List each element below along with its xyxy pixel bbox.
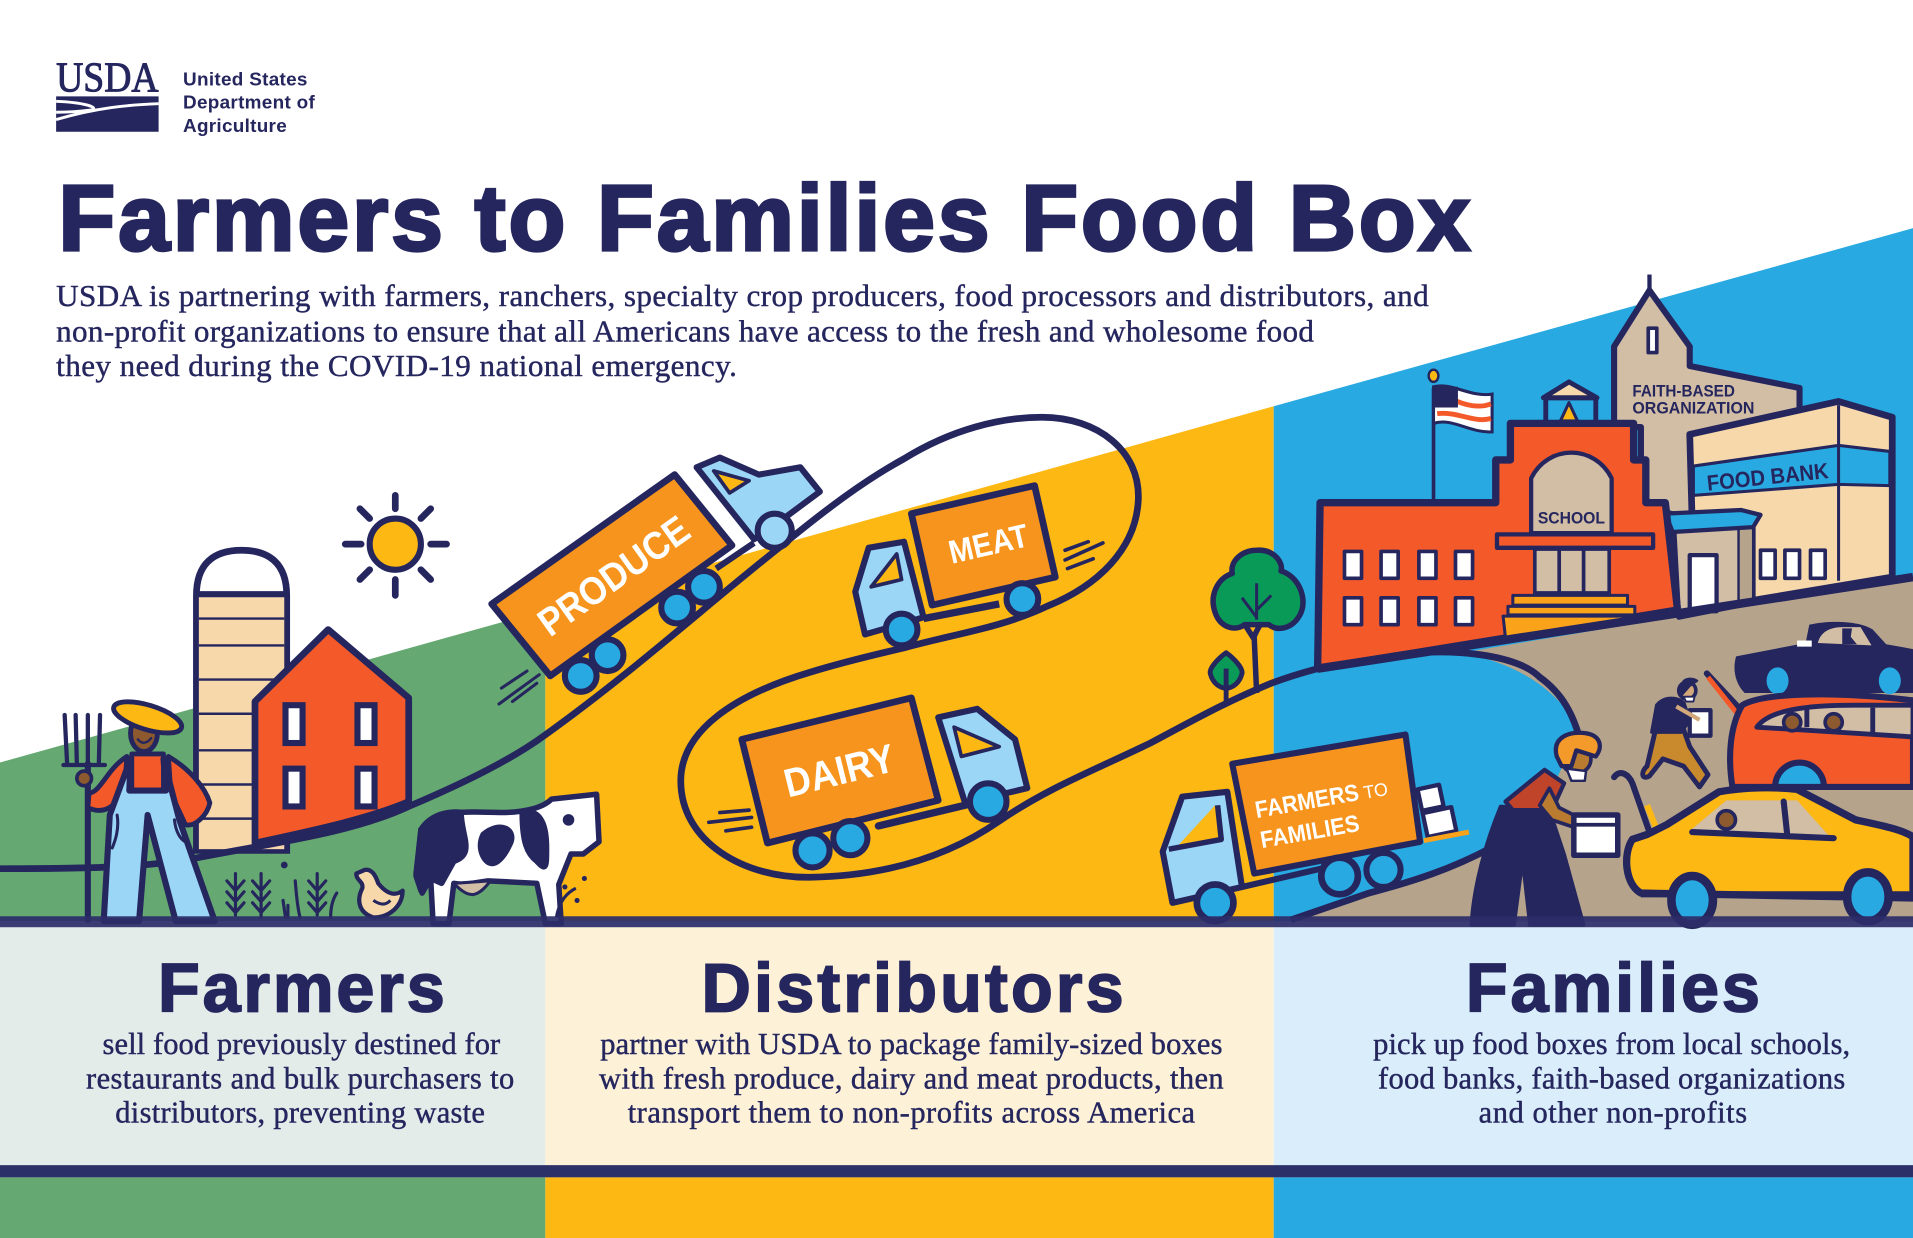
logo text: United States Department of Agriculture	[183, 69, 315, 137]
icon: flag and pole	[1429, 370, 1492, 503]
label: school: SCHOOL	[1538, 509, 1605, 527]
truck label: farmers to families: TO	[1362, 778, 1389, 803]
truck label: farmers to families: FARMERS	[1253, 779, 1361, 824]
text: distributors description: with fresh produce, dairy and meat products, then	[599, 1061, 1224, 1095]
illustration: large tree	[1213, 550, 1303, 693]
label: faith-based organization	[1632, 383, 1754, 418]
text: distributors description: transport them to non-profits across America	[628, 1095, 1195, 1129]
road: winding route from farm to families	[0, 417, 1581, 877]
label: faith-based organization: FAITH-BASED	[1632, 383, 1735, 401]
logo text: United States Department of Agriculture: Department of	[183, 93, 315, 114]
footer band: green	[0, 1177, 545, 1238]
icon: sun	[345, 495, 447, 595]
label: faith-based organization: ORGANIZATION	[1632, 400, 1754, 418]
road: upper ground line under buildings	[1318, 577, 1913, 669]
speed lines: meat truck	[1065, 542, 1103, 569]
illustration: wheat and grass	[227, 863, 337, 917]
background: farmers green wedge	[0, 610, 545, 921]
truck: farmers to families	[1163, 734, 1469, 921]
text: families description: pick up food boxes from local schools,	[1373, 1027, 1850, 1061]
background: families blue wedge	[1274, 228, 1913, 921]
illustration: silo	[196, 550, 287, 850]
heading: farmers: Farmers	[158, 950, 445, 1026]
illustration: chick	[356, 870, 403, 917]
vehicle: red car	[1707, 673, 1913, 787]
text: families description: and other non-profits	[1479, 1095, 1747, 1129]
truck: produce	[492, 458, 820, 692]
logo text: United States Department of Agriculture: Agriculture	[183, 116, 287, 137]
building: food bank	[1690, 401, 1892, 610]
label: food bank: FOOD BANK	[1706, 458, 1830, 496]
truck label: farmers to families	[1253, 774, 1395, 854]
speed lines: dairy truck	[709, 810, 752, 831]
truck label: farmers to families: FAMILIES	[1258, 810, 1361, 854]
illustration: walking volunteer with box	[1643, 679, 1710, 787]
illustration: cow	[416, 794, 599, 924]
logo: USDA: USDA	[56, 55, 159, 102]
footer band: blue	[1274, 1177, 1913, 1238]
text: farmers description: restaurants and bulk purchasers to	[86, 1061, 514, 1095]
text: families description: food banks, faith-based organizations	[1378, 1061, 1845, 1095]
building: school bell tower	[1543, 382, 1597, 423]
background: families tan ground	[1291, 577, 1913, 921]
footer stripe	[0, 1165, 1913, 1177]
illustration: small tree	[1210, 653, 1242, 704]
background: distributors yellow wedge	[545, 406, 1274, 921]
road: lower road to pickup site	[1291, 848, 1491, 920]
heading: distributors: Distributors	[702, 950, 1124, 1026]
illustration: farmer with pitchfork	[63, 695, 215, 921]
illustration: grass sprig	[556, 876, 586, 917]
footer band: yellow	[545, 1177, 1274, 1238]
intro paragraph: non-profit organizations to ensure that all Americans have access to the fresh and wholesome food	[56, 314, 1314, 349]
text: distributors description	[599, 1027, 1224, 1129]
panel: farmers caption background	[0, 927, 545, 1166]
text: farmers description: sell food previously destined for	[102, 1027, 500, 1061]
panel: distributors caption background	[545, 927, 1274, 1166]
intro paragraph: USDA is partnering with farmers, ranchers, specialty crop producers, food processors and distributors, and	[56, 278, 1429, 313]
ground band	[0, 916, 1913, 927]
illustration: barn	[255, 630, 409, 843]
speed lines: produce truck	[499, 671, 539, 704]
intro paragraph: they need during the COVID-19 national emergency.	[56, 348, 737, 383]
illustration: volunteer carrying food box	[1471, 733, 1618, 925]
logo text: United States Department of Agriculture: United States	[183, 69, 307, 90]
building: food bank entrance	[1665, 510, 1760, 617]
truck label: produce: PRODUCE	[530, 508, 698, 645]
text: farmers description: distributors, preventing waste	[115, 1095, 485, 1129]
heading: families: Families	[1466, 950, 1760, 1026]
truck: meat	[855, 486, 1055, 645]
text: families description	[1373, 1027, 1850, 1129]
building: faith-based organization	[1614, 275, 1800, 525]
truck: dairy	[742, 698, 1027, 867]
logo: USDA	[56, 55, 159, 132]
building: school	[1318, 423, 1678, 669]
truck label: dairy: DAIRY	[779, 736, 899, 806]
text: farmers description	[86, 1027, 514, 1129]
vehicle: yellow car with open trunk	[1614, 773, 1913, 925]
truck label: meat: MEAT	[945, 517, 1032, 571]
vehicle: navy pickup	[1734, 622, 1913, 694]
panel: families caption background	[1274, 927, 1913, 1166]
intro paragraph	[56, 278, 1429, 383]
text: distributors description: partner with USDA to package family-sized boxes	[600, 1027, 1222, 1061]
title: Farmers to Families Food Box	[59, 166, 1470, 270]
